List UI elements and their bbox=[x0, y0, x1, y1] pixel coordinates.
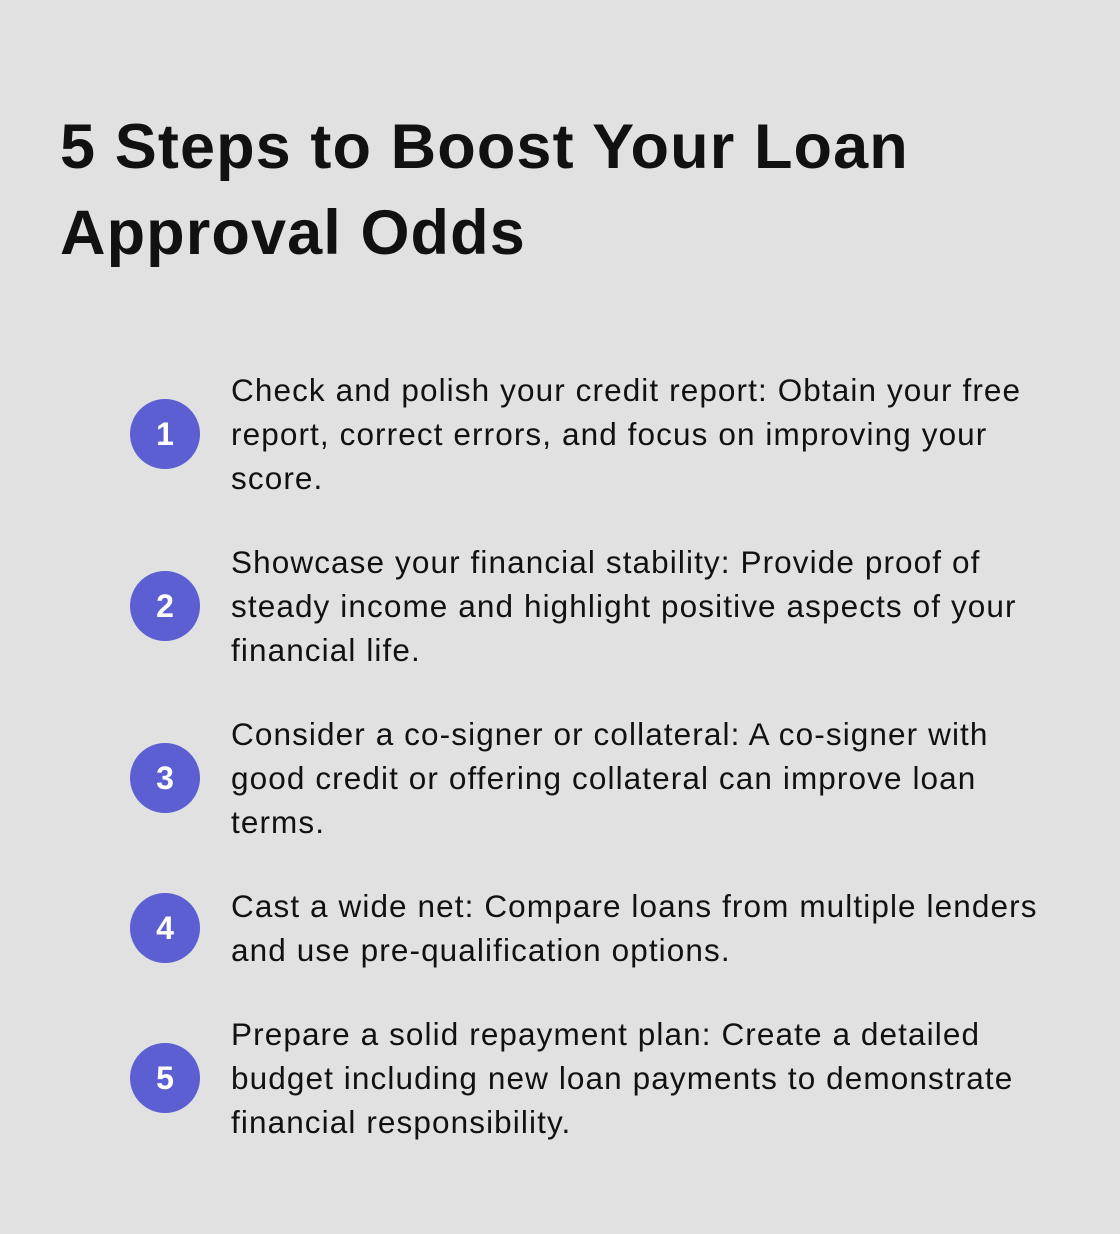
title: 5 Steps to Boost Your Loan bbox=[60, 112, 909, 182]
icon: number 4 bbox=[130, 893, 200, 963]
step 3 text bbox=[231, 716, 989, 840]
icon: number 5: 5 bbox=[156, 1060, 174, 1096]
step 1 text: report, correct errors, and focus on improving your bbox=[231, 416, 987, 452]
step 2 text: financial life. bbox=[231, 632, 421, 668]
icon: number 5 bbox=[130, 1043, 200, 1113]
icon: number 2 bbox=[130, 571, 200, 641]
step 1 text bbox=[231, 372, 1021, 496]
step 2 text: steady income and highlight positive aspects of your bbox=[231, 588, 1017, 624]
step 3 text: terms. bbox=[231, 804, 325, 840]
step 2 text bbox=[231, 544, 1017, 668]
icon: number 4: 4 bbox=[156, 910, 174, 946]
icon: number 1 bbox=[130, 399, 200, 469]
step 4 bbox=[130, 888, 1038, 968]
title: Approval Odds bbox=[60, 198, 526, 268]
step 3 text: Consider a co-signer or collateral: A co-signer with bbox=[231, 716, 989, 752]
step 1 text: Check and polish your credit report: Obtain your free bbox=[231, 372, 1021, 408]
step 5 bbox=[130, 1016, 1013, 1140]
step 4 text: Cast a wide net: Compare loans from multiple lenders bbox=[231, 888, 1038, 924]
step 2 text: Showcase your financial stability: Provide proof of bbox=[231, 544, 980, 580]
title bbox=[60, 112, 909, 268]
step 5 text: Prepare a solid repayment plan: Create a detailed bbox=[231, 1016, 980, 1052]
step 5 text: financial responsibility. bbox=[231, 1104, 571, 1140]
step 1 bbox=[130, 372, 1021, 496]
step 3 bbox=[130, 716, 989, 840]
icon: number 2: 2 bbox=[156, 588, 174, 624]
step 3 text: good credit or offering collateral can improve loan bbox=[231, 760, 976, 796]
step 5 text bbox=[231, 1016, 1013, 1140]
step 1 text: score. bbox=[231, 460, 323, 496]
step 4 text bbox=[231, 888, 1038, 968]
step 5 text: budget including new loan payments to demonstrate bbox=[231, 1060, 1013, 1096]
icon: number 3 bbox=[130, 743, 200, 813]
step 4 text: and use pre-qualification options. bbox=[231, 932, 731, 968]
step 2 bbox=[130, 544, 1017, 668]
icon: number 1: 1 bbox=[156, 416, 174, 452]
icon: number 3: 3 bbox=[156, 760, 174, 796]
